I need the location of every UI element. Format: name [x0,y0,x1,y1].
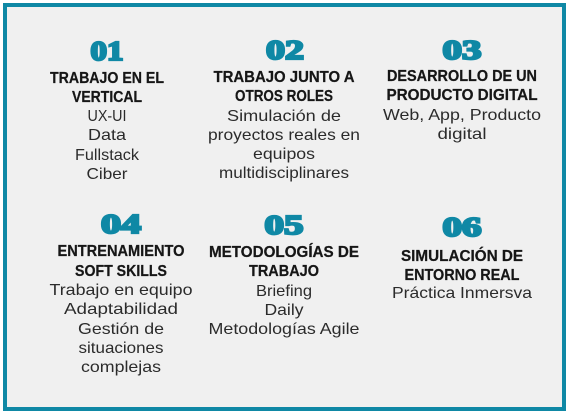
heading 03 [386,68,538,104]
list 01: Fullstack [75,147,140,164]
heading 05: METODOLOGÍAS DE [209,244,359,261]
description 02 [208,108,360,182]
list 04: Gestión de [78,321,164,338]
description 03 [383,107,541,143]
list 01: Ciber [86,166,128,183]
list 05: Briefing [256,283,312,300]
number 06: 06 [442,212,482,242]
list 05: Daily [264,302,304,319]
list 04: Adaptabilidad [64,301,178,318]
list 01: Data [88,127,126,144]
heading 06: ENTORNO REAL [404,267,520,284]
heading 04: ENTRENAMIENTO [58,243,184,260]
heading 02: TRABAJO JUNTO A [214,69,354,86]
heading 06 [401,247,523,284]
heading 04 [58,243,184,280]
block 06: simulación de entorno real [392,212,532,302]
number 02: 02 [266,35,304,65]
list 05: Metodologías Agile [208,321,360,338]
description 02: equipos [253,146,315,163]
heading 02 [214,69,354,105]
number 01: 01 [90,36,124,66]
description 03: Web, App, Producto [383,107,541,124]
heading 03: DESARROLLO DE UN [387,68,537,85]
heading 02: OTROS ROLES [235,88,333,105]
block 05: metodologías de trabajo [208,210,360,338]
block 02: trabajo junto a otros roles [208,35,360,182]
heading 01 [50,70,164,106]
description 02: proyectos reales en [208,127,360,144]
heading 04: SOFT SKILLS [75,263,167,280]
heading 01: VERTICAL [72,89,142,106]
heading 05: TRABAJO [249,263,319,280]
list 04: complejas [81,359,161,376]
list 04: Trabajo en equipo [50,282,193,299]
description 03: digital [438,126,486,143]
heading 06: SIMULACIÓN DE [401,247,523,265]
list 05 [208,283,360,338]
block 04: entrenamiento soft skills [50,209,193,376]
number 05: 05 [264,210,304,240]
description 02: multidisciplinares [219,165,349,182]
number 03: 03 [442,35,482,65]
block 01: trabajo en el vertical [50,36,164,183]
heading 05 [209,244,359,280]
list 01: UX-UI [88,108,126,125]
description 06: Práctica Inmersva [392,285,532,302]
list 04 [50,282,193,376]
list 04: situaciones [78,340,164,357]
block 03: desarrollo de un producto digital [383,35,541,143]
description 02: Simulación de [227,108,341,125]
number 04: 04 [101,209,141,239]
heading 03: PRODUCTO DIGITAL [386,87,538,104]
list 01 [75,108,140,183]
heading 01: TRABAJO EN EL [50,70,164,87]
